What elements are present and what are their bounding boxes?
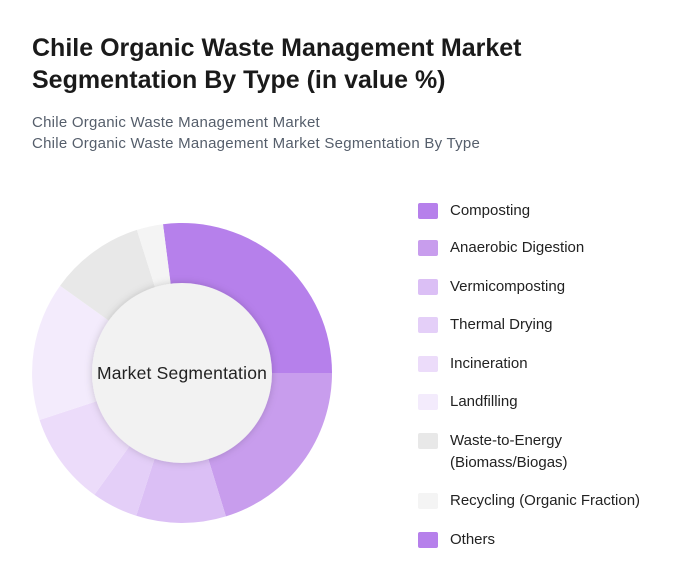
donut chart — [32, 223, 332, 523]
legend: Others — [450, 531, 495, 548]
donut chart: Market Segmentation — [97, 363, 267, 383]
legend — [418, 202, 640, 548]
legend: Landfilling — [450, 393, 518, 410]
title: Chile Organic Waste Management Market — [32, 34, 521, 62]
subtitle: Chile Organic Waste Management Market — [32, 114, 320, 131]
legend: Thermal Drying — [450, 316, 553, 333]
subtitle: Chile Organic Waste Management Market Segmentation By Type — [32, 135, 480, 152]
title — [32, 34, 522, 94]
legend: Incineration — [450, 355, 528, 372]
legend: (Biomass/Biogas) — [450, 454, 568, 471]
legend: Recycling (Organic Fraction) — [450, 492, 640, 509]
legend: Composting — [450, 202, 530, 219]
subtitle — [32, 114, 480, 152]
legend: Waste-to-Energy — [450, 432, 562, 449]
legend: Vermicomposting — [450, 278, 565, 295]
legend: Anaerobic Digestion — [450, 239, 584, 256]
title: Segmentation By Type (in value %) — [32, 66, 446, 94]
